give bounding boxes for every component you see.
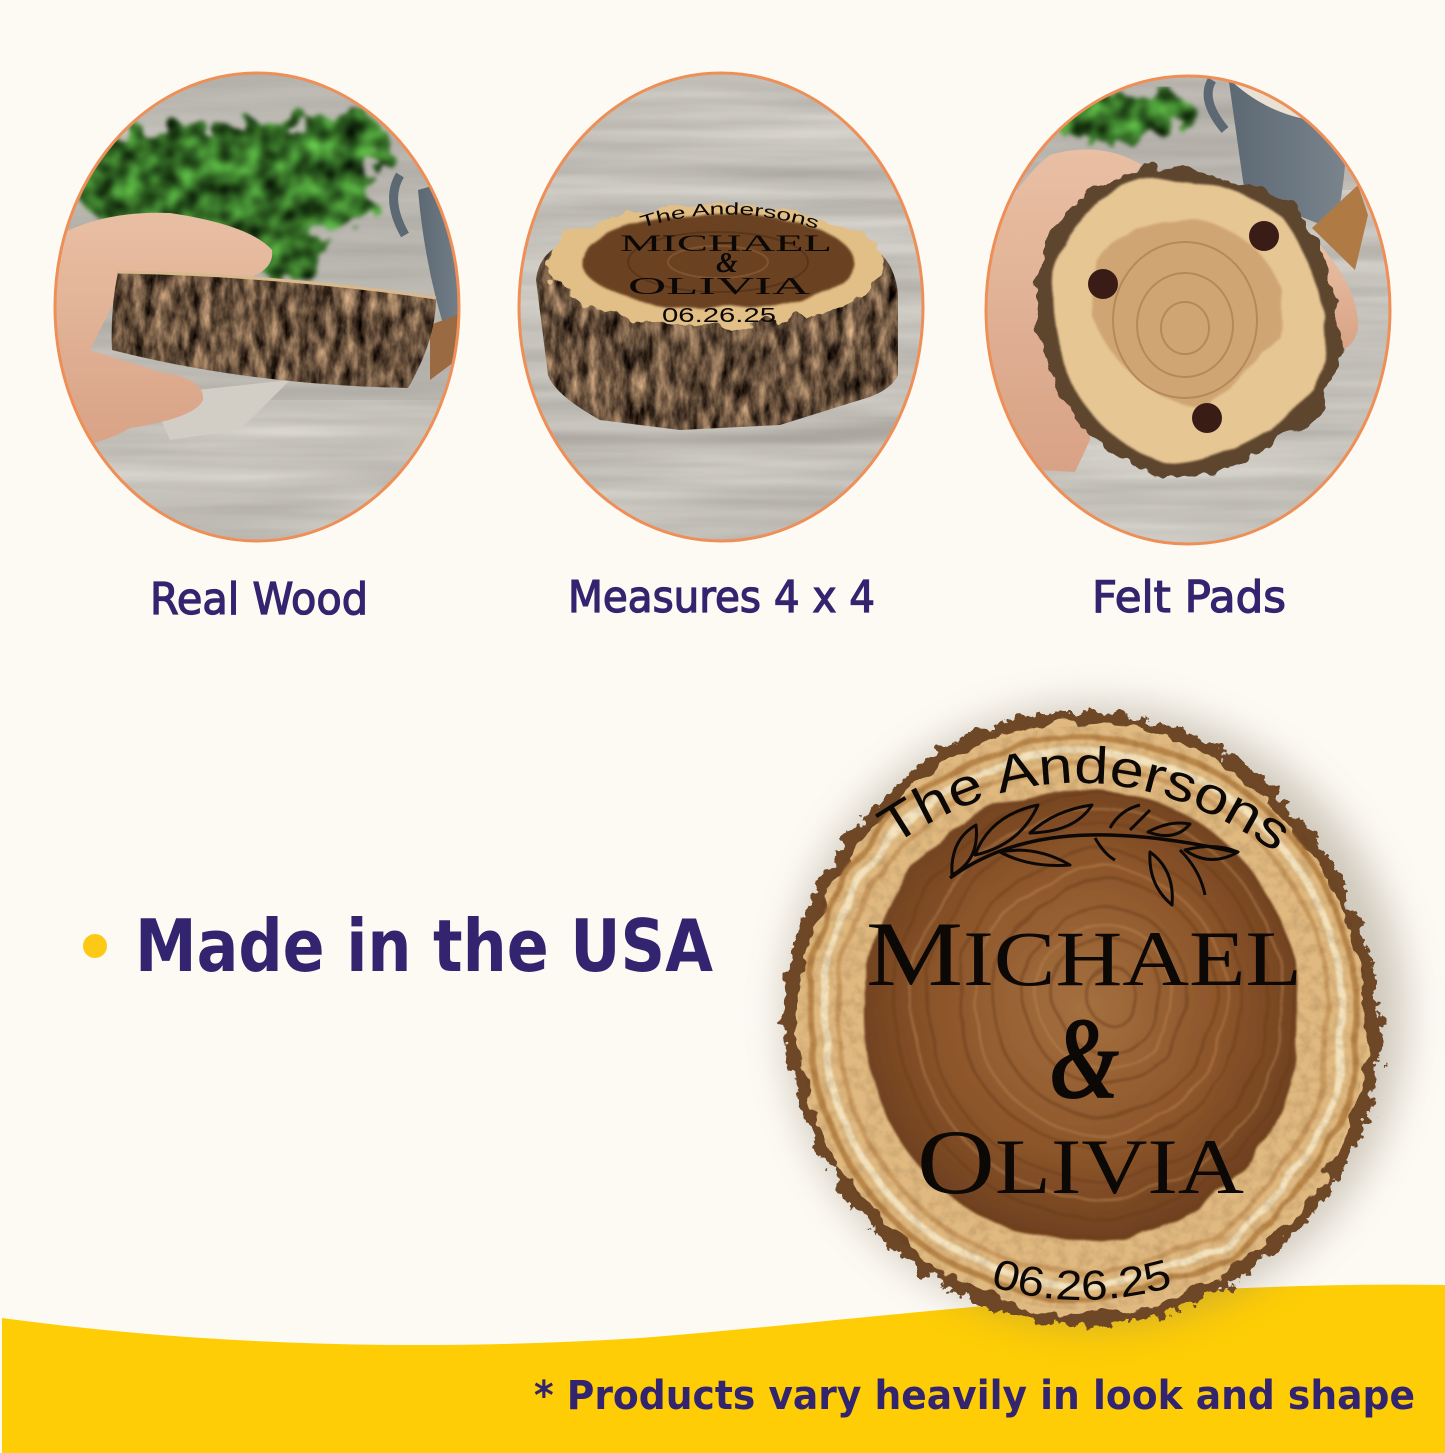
caption: felt pads: Felt Pads <box>1092 572 1286 623</box>
coaster underside <box>1038 168 1342 478</box>
arc text: date: 06.26.25 <box>994 1260 1170 1300</box>
heartwood <box>864 790 1298 1240</box>
bullet <box>83 934 107 958</box>
icon: hand <box>985 149 1142 472</box>
small engraving: OLIVIA <box>628 274 811 300</box>
panel: felt pads photo <box>980 60 1395 550</box>
wood grain <box>798 726 1368 1310</box>
icon: felt pads <box>1088 221 1279 433</box>
icon: plant <box>75 111 390 283</box>
sapwood rings <box>809 738 1357 1298</box>
caption: real wood: Real Wood <box>150 574 368 625</box>
small engraving <box>621 202 830 322</box>
small engraving: MICHAEL <box>620 231 832 256</box>
icon: mug <box>418 187 458 320</box>
text: ampersand: & <box>1050 993 1120 1124</box>
log side <box>112 272 436 388</box>
icon: laurel branch <box>950 805 1238 905</box>
heading: made in the usa: Made in the USA <box>135 904 713 988</box>
text: olivia: OLIVIA <box>917 1111 1244 1213</box>
coaster top <box>545 202 884 331</box>
arc text: date <box>994 1260 1170 1300</box>
panel: measures photo <box>518 72 924 542</box>
small engraving: The Andersons <box>639 202 818 228</box>
text: michael: MICHAEL <box>866 903 1302 1005</box>
engraved coaster <box>766 686 1424 1342</box>
icon: hand <box>50 213 272 450</box>
yellow wave footer <box>2 1285 1445 1453</box>
small engraving: 06.26.25 <box>662 305 776 327</box>
arc text: the andersons: The Andersons <box>875 746 1286 848</box>
panel: real wood photo <box>50 70 470 550</box>
footnote: * Products vary heavily in look and shape <box>534 1373 1415 1419</box>
bark edge <box>782 712 1382 1326</box>
coaster side bark <box>536 240 898 430</box>
caption: measures: Measures 4 x 4 <box>568 572 875 623</box>
sapwood <box>796 722 1368 1314</box>
icon: mug <box>1229 82 1345 223</box>
small engraving: & <box>716 248 738 279</box>
